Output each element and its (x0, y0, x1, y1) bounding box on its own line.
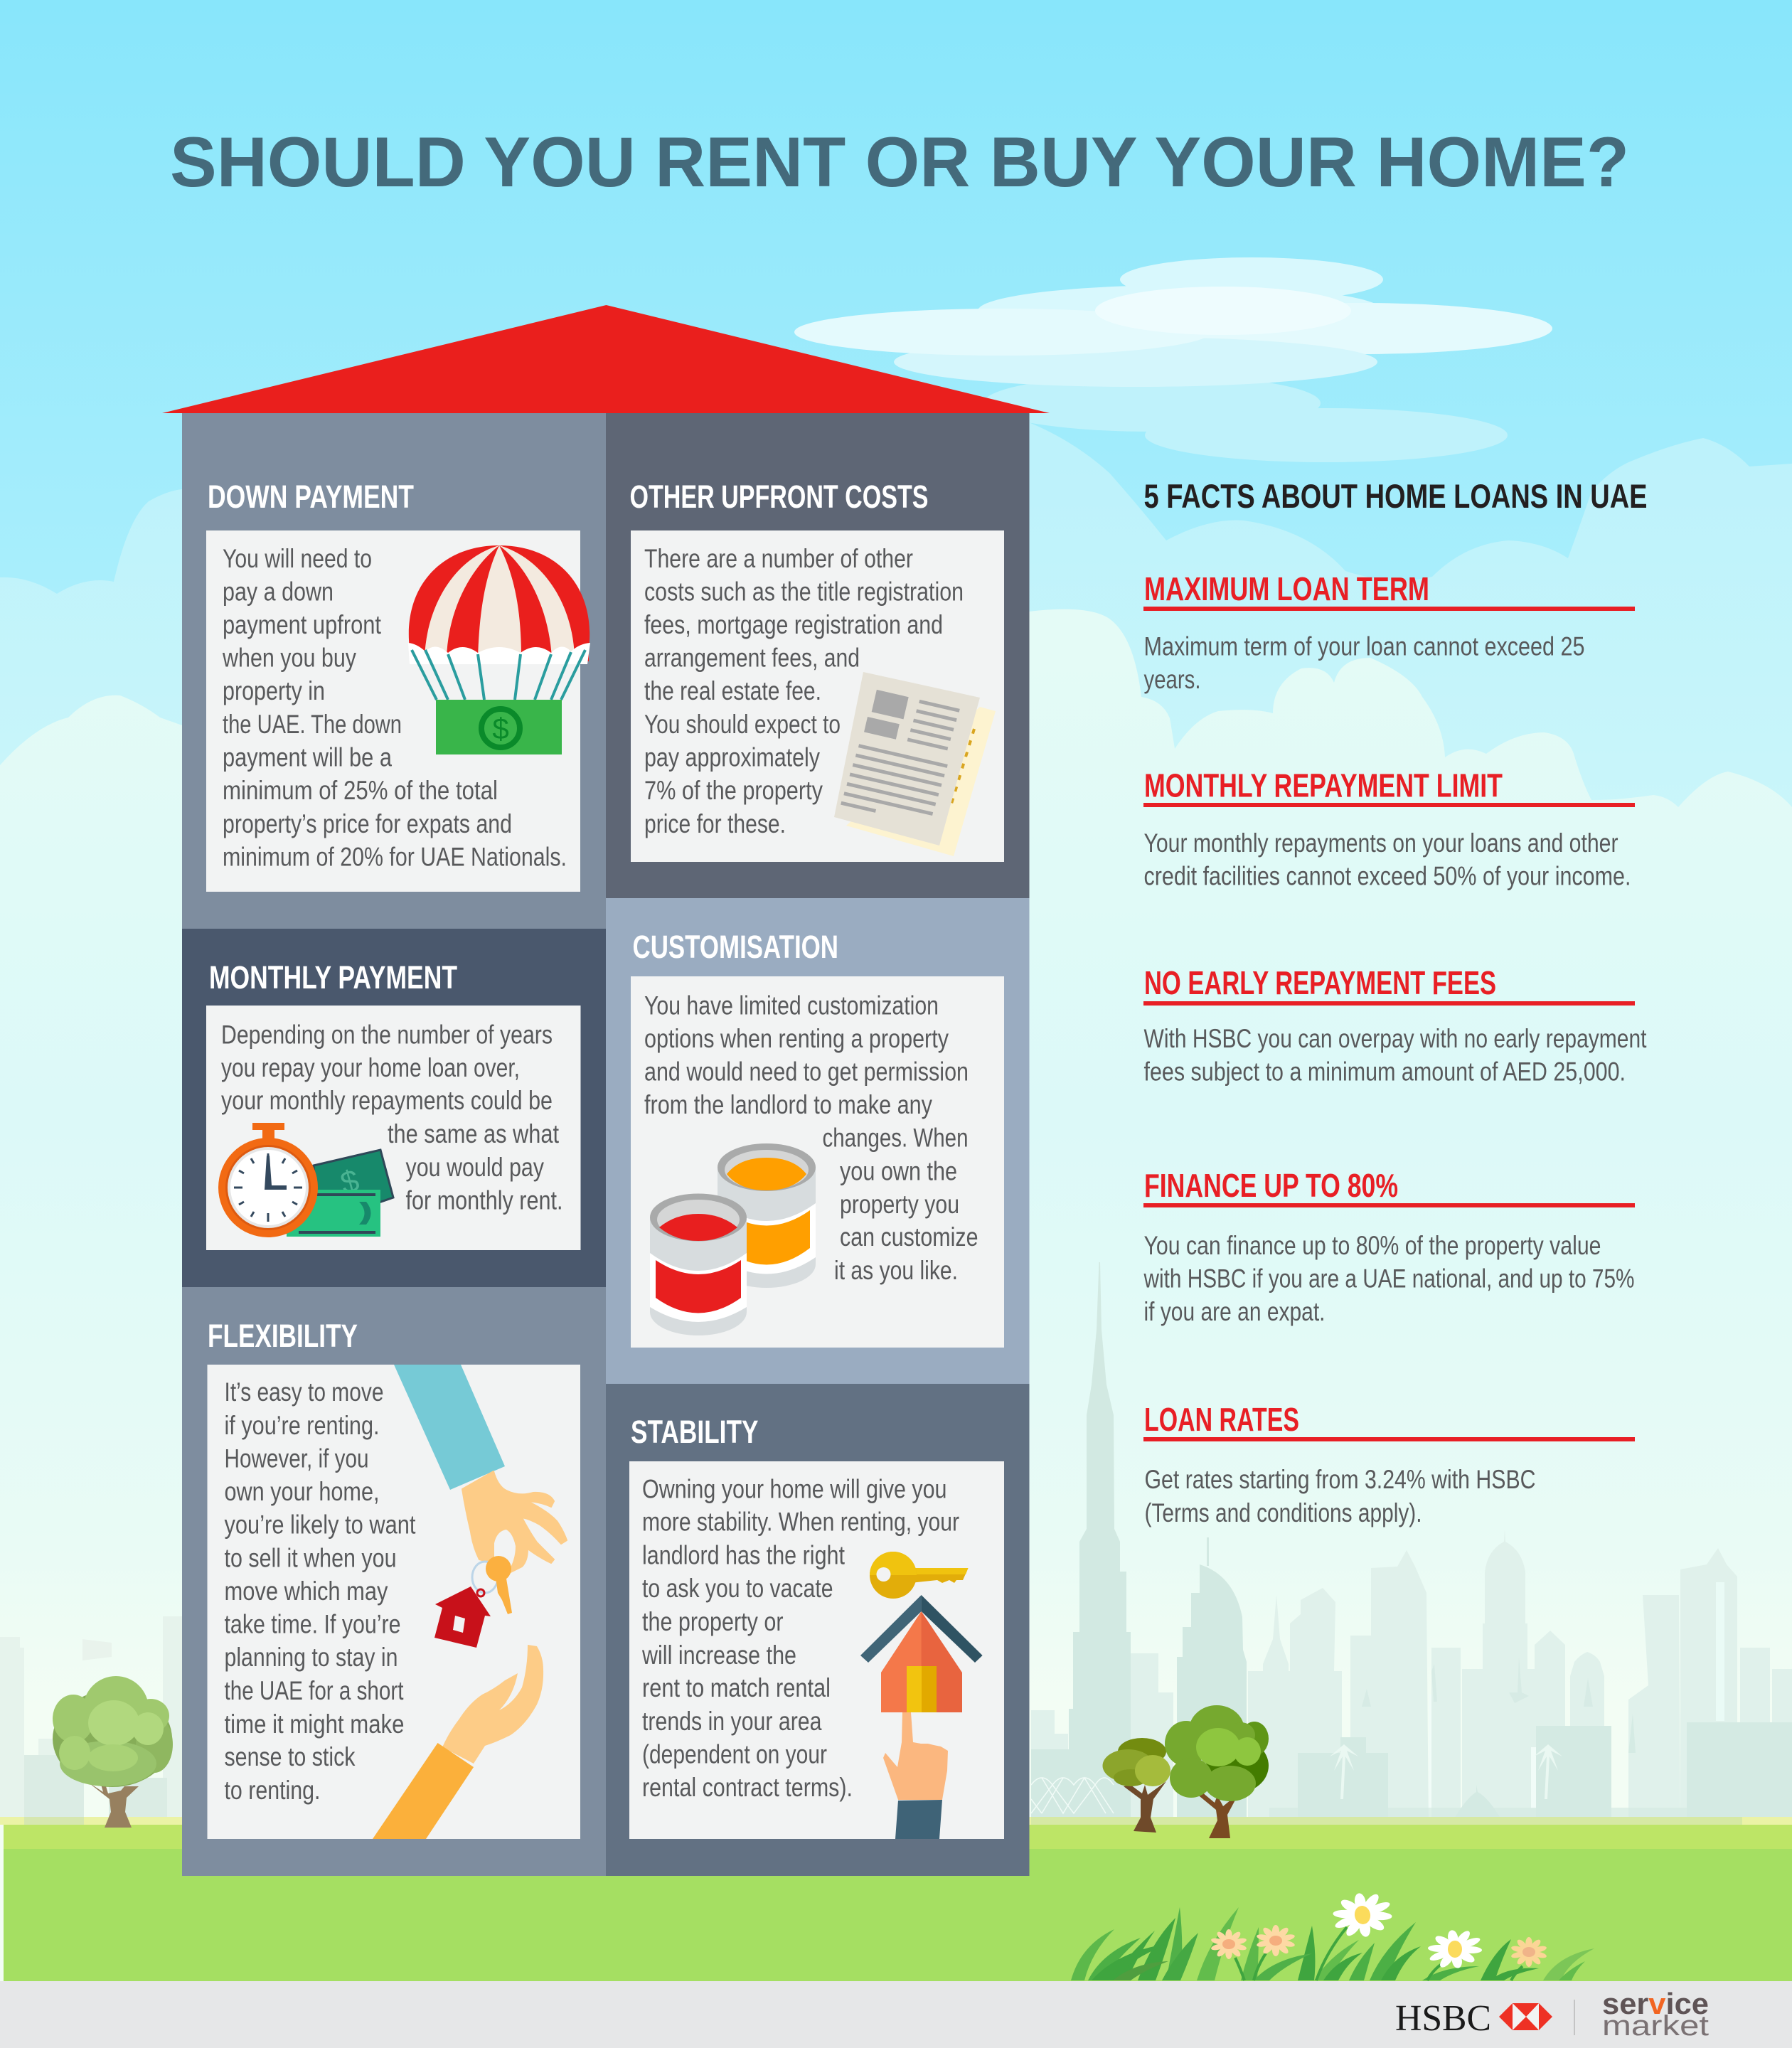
house (162, 305, 1050, 1876)
body text: you repay your home loan over, (221, 1053, 520, 1082)
icon: hands passing house key (373, 1365, 567, 1839)
body text: the property or (642, 1607, 784, 1636)
body text: will increase the (641, 1641, 796, 1670)
body text: rent to match rental (642, 1673, 831, 1702)
card (631, 530, 1004, 862)
fact: loan rates: (Terms and conditions apply). (1145, 1498, 1422, 1527)
body text: you would pay (405, 1153, 544, 1182)
card (629, 1461, 1004, 1839)
panel: flexibility (182, 1287, 606, 1876)
body text: you own the (840, 1156, 957, 1186)
body text: costs such as the title registration (644, 577, 964, 606)
body text (225, 1377, 416, 1805)
body text: property in (223, 676, 325, 705)
fact: finance up to 80% (1143, 1167, 1635, 1326)
fact: finance up to 80%: FINANCE UP TO 80% (1144, 1167, 1398, 1204)
body text: trends in your area (642, 1707, 822, 1736)
service market logo: market (1602, 2010, 1709, 2042)
body text: can customize (840, 1222, 978, 1252)
heading: stability: STABILITY (631, 1414, 758, 1450)
icon: documents (834, 672, 996, 856)
body text: You should expect to (644, 710, 841, 739)
fact: no early repayment fees: With HSBC you can overpay with no early repayment (1143, 1024, 1647, 1053)
body text: There are a number of other (644, 544, 913, 573)
body text: the UAE for a short (225, 1676, 404, 1705)
body text: Depending on the number of years (221, 1020, 553, 1050)
body text: You have limited customization (644, 991, 939, 1020)
icon: stopwatch and money: $ (337, 1163, 363, 1201)
body text: own your home, (225, 1477, 380, 1506)
heading: customisation: CUSTOMISATION (633, 929, 838, 965)
body text: 7% of the property (644, 776, 823, 805)
panel: monthly payment (182, 929, 606, 1287)
body text: to renting. (225, 1776, 320, 1805)
body text: to ask you to vacate (642, 1574, 833, 1603)
fact: no early repayment fees: NO EARLY REPAYMENT FEES (1144, 964, 1496, 1001)
title: SHOULD YOU RENT OR BUY YOUR HOME? (170, 122, 1629, 201)
panel: other upfront costs (606, 413, 1030, 898)
body text (644, 991, 978, 1285)
fact: finance up to 80%: with HSBC if you are a UAE national, and up to 75% (1143, 1264, 1634, 1293)
body text: It’s easy to move (225, 1377, 384, 1407)
fact: finance up to 80%: if you are an expat. (1143, 1297, 1326, 1326)
fact: maximum loan term: years. (1143, 665, 1200, 694)
body text: time it might make (225, 1710, 404, 1739)
skyline (0, 1262, 1792, 1828)
fact: no early repayment fees (1143, 964, 1647, 1087)
body text (221, 1020, 563, 1215)
card (206, 1006, 580, 1250)
fact: monthly repayment limit: credit facilities cannot exceed 50% of your income. (1143, 862, 1631, 890)
body text: sense to stick (225, 1742, 356, 1771)
heading: flexibility: FLEXIBILITY (208, 1318, 358, 1354)
body text: property you (840, 1190, 959, 1219)
body text: property’s price for expats and (223, 809, 512, 838)
body text: payment will be a (223, 742, 392, 772)
body text: take time. If you’re (225, 1610, 401, 1638)
heading: 5 facts: 5 FACTS ABOUT HOME LOANS IN UAE (1143, 477, 1647, 515)
body text: the same as what (388, 1119, 560, 1148)
panel: customisation (606, 898, 1030, 1384)
body text: price for these. (644, 809, 786, 838)
body text: (dependent on your (642, 1739, 827, 1769)
roof (162, 305, 1050, 413)
body text: it as you like. (834, 1256, 958, 1285)
body text: landlord has the right (642, 1540, 846, 1570)
panel: 5 facts about home loans (1143, 477, 1647, 1527)
fact: monthly repayment limit: Your monthly repayments on your loans and other (1143, 828, 1618, 858)
body text: changes. When (822, 1124, 969, 1152)
service market logo (1602, 1987, 1709, 2042)
fact: maximum loan term: MAXIMUM LOAN TERM (1144, 570, 1429, 607)
body text: rental contract terms). (642, 1773, 853, 1802)
card (631, 976, 1004, 1348)
body text: from the landlord to make any (644, 1090, 932, 1119)
icon: parachute with money: $ (492, 712, 509, 745)
fact: monthly repayment limit (1143, 767, 1635, 890)
body text: for monthly rent. (405, 1186, 563, 1215)
body text: when you buy (222, 643, 356, 673)
divider (1574, 2000, 1575, 2035)
body text: Owning your home will give you (642, 1475, 947, 1503)
HSBC wordmark: HSBC (1395, 1998, 1491, 2039)
fact: maximum loan term (1143, 570, 1635, 694)
body text: You will need to (223, 544, 372, 573)
body text: the real estate fee. (644, 676, 821, 705)
service market logo: service (1602, 1987, 1709, 2020)
body text: However, if you (225, 1444, 368, 1473)
right trees (1102, 1705, 1269, 1838)
body text (222, 544, 567, 872)
body text: pay a down (223, 577, 334, 606)
fact: loan rates: LOAN RATES (1144, 1401, 1299, 1438)
grass and flowers (1071, 1888, 1594, 1980)
body text (641, 1475, 959, 1802)
ground (0, 1817, 1792, 1981)
body text: you’re likely to want (225, 1510, 416, 1539)
fact: loan rates (1143, 1401, 1635, 1527)
card (208, 1365, 580, 1839)
heading: monthly payment: MONTHLY PAYMENT (209, 959, 457, 996)
fact: finance up to 80%: You can finance up to 80% of the property value (1143, 1231, 1601, 1260)
body text: more stability. When renting, your (642, 1508, 959, 1536)
panel: down payment (182, 413, 606, 929)
body text: minimum of 25% of the total (223, 776, 498, 805)
left tree (53, 1676, 173, 1828)
body text: your monthly repayments could be (221, 1086, 553, 1115)
icon: paint cans (650, 1143, 816, 1335)
body text: minimum of 20% for UAE Nationals. (223, 842, 567, 872)
HSBC hexagon logo (1499, 2003, 1552, 2030)
icon: key, house and pointing hand (860, 1552, 983, 1839)
footer (0, 1981, 1792, 2048)
fact: maximum loan term: Maximum term of your loan cannot exceed 25 (1143, 631, 1584, 661)
fact: no early repayment fees: fees subject to a minimum amount of AED 25,000. (1143, 1057, 1626, 1087)
body text: move which may (225, 1577, 388, 1606)
body text: arrangement fees, and (644, 643, 860, 673)
fact: loan rates: Get rates starting from 3.24% with HSBC (1145, 1465, 1536, 1494)
body text: payment upfront (223, 610, 382, 639)
heading: down payment: DOWN PAYMENT (208, 479, 414, 515)
body text: options when renting a property (644, 1024, 949, 1053)
body text: pay approximately (644, 742, 820, 772)
icon: parachute with money (408, 545, 592, 754)
body text: planning to stay in (225, 1643, 398, 1672)
body text (644, 544, 964, 838)
card (206, 530, 580, 892)
body text: fees, mortgage registration and (644, 610, 943, 639)
body text: the UAE. The down (223, 710, 402, 739)
panel: stability (606, 1384, 1030, 1876)
fact: monthly repayment limit: MONTHLY REPAYMENT LIMIT (1144, 767, 1503, 804)
heading: other upfront costs: OTHER UPFRONT COSTS (630, 479, 929, 515)
body text: and would need to get permission (644, 1057, 969, 1087)
icon: stopwatch and money (218, 1123, 393, 1237)
body text: to sell it when you (225, 1543, 397, 1573)
body text: if you’re renting. (225, 1411, 380, 1440)
